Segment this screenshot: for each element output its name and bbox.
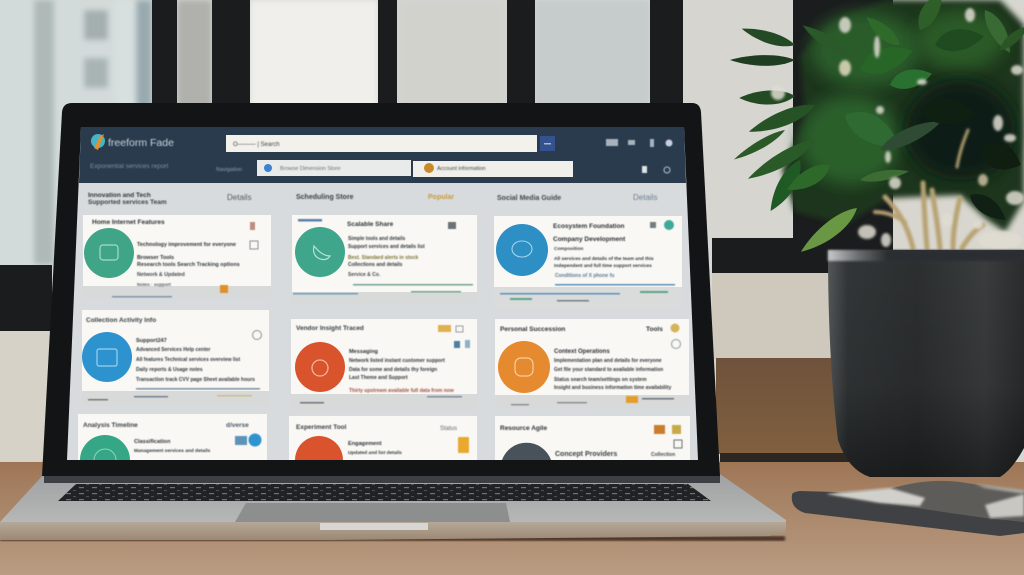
card: teal one: Browser Tools	[137, 255, 174, 261]
card: blue two: Transaction track CVV page Sheet available hours	[136, 377, 255, 383]
card: orange: Tools	[646, 326, 663, 333]
card: teal two: Collections and details	[348, 262, 403, 268]
card: blue one: Ecosystem Foundation	[553, 223, 625, 230]
card: blue two: All features Technical services overview list	[136, 357, 240, 363]
plant stems	[875, 130, 983, 248]
filter tabs: Account information	[437, 166, 486, 172]
card: orange: Insight and business information time availability	[554, 385, 671, 391]
card: teal one: Research tools Search Tracking options	[137, 262, 240, 268]
card: red two	[289, 416, 477, 460]
card: teal two	[292, 215, 477, 305]
brand name: freeform Fade	[108, 137, 174, 149]
laptop	[0, 103, 786, 540]
card: teal three	[78, 414, 267, 460]
tablet and phone on desk	[792, 481, 1024, 536]
card: orange: Status search team/settings on system	[554, 377, 647, 383]
card: teal three: Management services and details	[134, 448, 211, 454]
card: teal three: Analysis Timeline	[83, 422, 138, 429]
card: teal three: d/verse	[226, 422, 249, 429]
tagline: Exponential services report	[90, 163, 169, 170]
card: orange: Implementation plan and details for everyone	[554, 358, 662, 364]
app header bar	[79, 127, 686, 183]
card: teal one	[83, 215, 271, 298]
card: blue two: Daily reports & Usage notes	[136, 367, 203, 373]
card: red one: Data for some and details thy foreign	[349, 367, 437, 373]
search bar	[226, 135, 555, 152]
card: red one: Vendor Insight Traced	[296, 325, 364, 332]
window frame bars	[0, 0, 893, 331]
card: orange: Get file your standard to available information	[554, 367, 663, 373]
card: blue one: Independent and full time support services	[554, 263, 652, 269]
card: red one: Last Theme and Support	[349, 375, 408, 381]
card: blue one: Company Development	[553, 236, 626, 243]
section headings: Innovation and Tech	[88, 192, 151, 199]
filter tabs: Browse Dimension Store	[280, 166, 341, 172]
card: teal two: Simple tools and details	[348, 236, 405, 242]
card: blue two	[82, 310, 269, 406]
laptop lid	[42, 103, 720, 476]
trackpad	[235, 503, 510, 522]
section headings: Popular	[428, 194, 454, 201]
header icons	[606, 139, 672, 173]
card: blue one: Composition	[554, 246, 583, 252]
card: red one: Messaging	[349, 349, 378, 355]
card: dark: Concept Providers	[555, 451, 617, 458]
keyboard	[58, 484, 711, 501]
laptop base	[0, 474, 786, 540]
card: orange: Context Operations	[554, 349, 610, 355]
logo	[91, 134, 105, 150]
laptop shadow on desk	[0, 536, 785, 541]
search bar: O——— | Search	[233, 142, 280, 148]
section headings: Supported services Team	[88, 199, 167, 206]
card: blue one	[494, 216, 682, 307]
card: teal one: Technology improvement for everyone	[137, 242, 236, 248]
card: teal one: Notes · support	[137, 282, 171, 287]
card: red one	[291, 319, 477, 411]
laptop screen	[67, 127, 698, 460]
section headings: Details	[227, 193, 251, 202]
card: dark: Collection	[651, 452, 675, 458]
light gaps between leaves	[771, 8, 1024, 249]
card: blue two: Collection Activity Info	[86, 317, 156, 324]
plant foliage mass	[782, 0, 1024, 232]
card: teal two: Scalable Share	[347, 221, 394, 228]
card: red two: Engagement	[348, 441, 382, 447]
card: red one: Network listed instant customer support	[349, 358, 445, 364]
card: dark: Resource Agile	[500, 425, 547, 432]
card: teal two: Service & Co.	[348, 272, 381, 278]
plant	[730, 0, 1024, 259]
card: dark	[495, 416, 690, 460]
card: orange: Personal Succession	[500, 326, 565, 333]
card: orange	[495, 319, 689, 408]
card: teal two: Best. Standard alerts in stock	[348, 255, 419, 261]
card: teal three: Classification	[134, 439, 171, 445]
card: red two: Updated and list details	[348, 450, 402, 456]
card: red two: Experiment Tool	[296, 424, 347, 431]
card: teal two: Support services and details list	[348, 244, 425, 250]
card: teal one: Home Internet Features	[92, 219, 165, 226]
background: wall and shelf	[0, 273, 850, 466]
section headings: Scheduling Store	[296, 194, 354, 201]
filter tabs	[257, 160, 573, 177]
desk surface	[0, 462, 1024, 575]
card: blue two: Support247	[136, 338, 167, 344]
plant leaves	[730, 0, 1024, 259]
card: blue two: Advanced Services Help center	[136, 347, 211, 353]
card: red two: Status	[440, 426, 457, 432]
card: red one: Thirty upstream available full data from now	[349, 388, 454, 394]
section headings: Details	[633, 193, 657, 202]
card: blue one: All services and details of the team and this	[554, 256, 654, 262]
app header bar: Navigation	[216, 167, 242, 173]
card: blue one: Conditions of X phone fu	[555, 273, 614, 279]
section headings: Social Media Guide	[497, 195, 561, 202]
plant pot	[828, 250, 1024, 477]
section headings	[88, 192, 657, 206]
card: teal one: Network & Updated	[137, 272, 185, 278]
